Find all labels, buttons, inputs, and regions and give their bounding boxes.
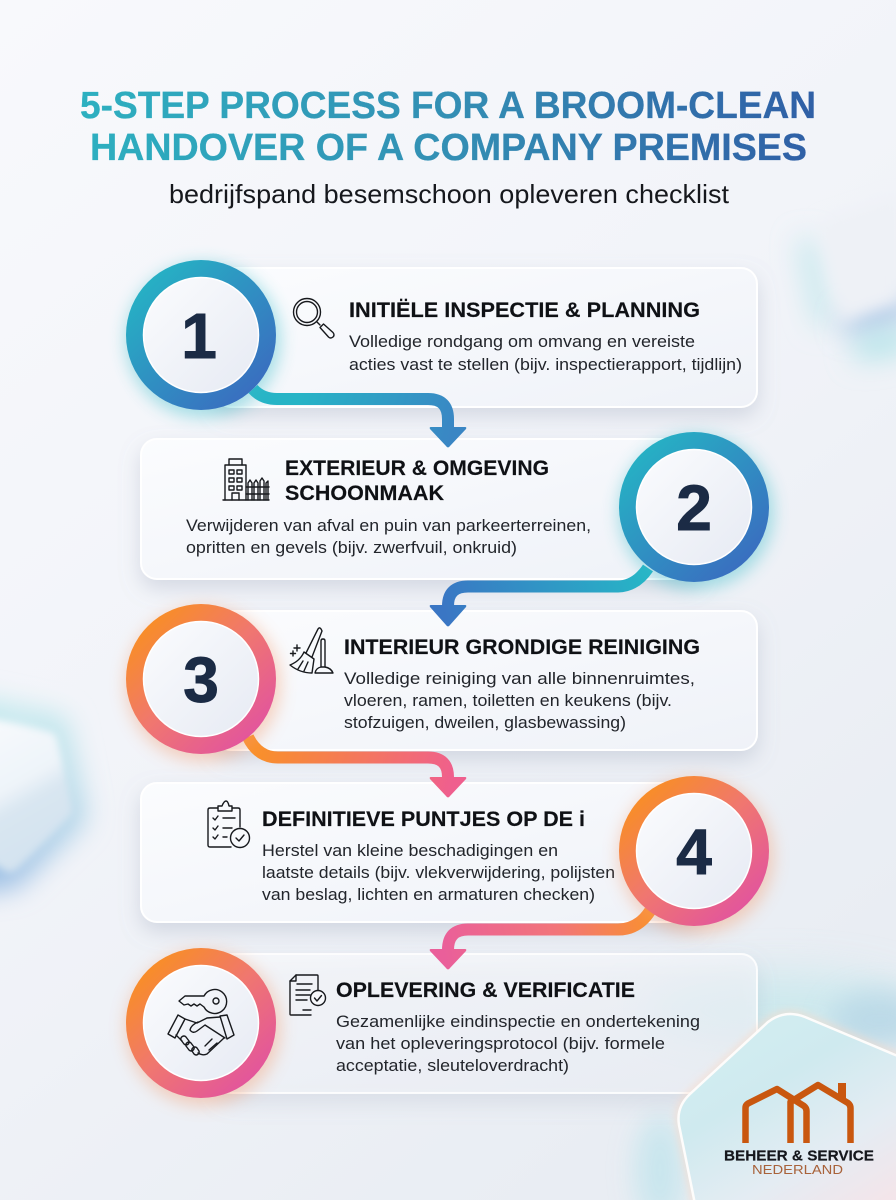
- arrow: step 4 to 5: [430, 911, 650, 970]
- text: step 2 description: [186, 516, 591, 557]
- logo: Beheer & Service Nederland: [724, 1083, 874, 1177]
- logo name: BEHEER & SERVICE: [724, 1148, 874, 1164]
- text: step 4 description: laatste details (bijv. vlekverwijdering, polijsten: [262, 863, 615, 882]
- panel: step 2 card: [141, 439, 701, 579]
- icon: checklist clipboard: [208, 801, 250, 848]
- heading: step 3: INTERIEUR GRONDIGE REINIGING: [344, 636, 700, 659]
- logo subline: NEDERLAND: [752, 1162, 843, 1177]
- icon: signed document: [290, 975, 326, 1015]
- text: step 4 description: Herstel van kleine beschadigingen en: [262, 841, 558, 860]
- text: step 5 description: Gezamenlijke eindinspectie en ondertekening: [336, 1012, 700, 1031]
- step 2 number circle: [618, 432, 774, 590]
- panel: step 5 card: [215, 954, 757, 1093]
- step 3 number circle: 3: [183, 644, 219, 716]
- icon: key: [179, 989, 227, 1014]
- icon: handshake: [168, 1015, 234, 1055]
- logo badge background: [678, 1014, 896, 1200]
- text: step 5 description: van het opleveringsprotocol (bijv. formele: [336, 1034, 665, 1053]
- panel: step 4 card: [141, 783, 701, 922]
- step 4 number circle: 4: [676, 816, 712, 888]
- text: step 1 description: [349, 332, 742, 374]
- step 2 number circle: 2: [676, 472, 712, 544]
- text: step 3 description: vloeren, ramen, toiletten en keukens (bijv.: [344, 691, 672, 710]
- title: 5-STEP PROCESS FOR A BROOM-CLEAN: [80, 85, 816, 127]
- subtitle: bedrijfspand besemschoon opleveren checklist: [169, 179, 730, 209]
- icon: twin house roofline: [746, 1083, 850, 1143]
- heading: step 2: EXTERIEUR & OMGEVING: [285, 457, 549, 480]
- step 5 handshake circle: [125, 948, 281, 1106]
- title: [80, 85, 816, 169]
- step 1 number circle: 1: [181, 300, 217, 372]
- heading: step 4: DEFINITIEVE PUNTJES OP DE i: [262, 808, 585, 831]
- icon: building and fence: [223, 459, 269, 500]
- step 4 number circle: [618, 776, 774, 934]
- step 3 number circle: [125, 604, 281, 762]
- arrow: step 3 to 4: [248, 737, 466, 798]
- text: step 5 description: acceptatie, sleuteloverdracht): [336, 1056, 569, 1075]
- icon: magnifying glass: [294, 298, 334, 338]
- heading: step 2: [285, 457, 549, 505]
- text: step 2 description: Verwijderen van afval en puin van parkeerterreinen,: [186, 516, 591, 535]
- text: step 5 description: [336, 1012, 700, 1075]
- text: step 3 description: [344, 669, 695, 732]
- arrow: step 1 to 2: [253, 389, 466, 448]
- text: step 1 description: acties vast te stellen (bijv. inspectierapport, tijdlijn): [349, 355, 742, 374]
- heading: step 5: OPLEVERING & VERIFICATIE: [336, 979, 635, 1002]
- panel: step 1 card: [215, 268, 757, 407]
- icon: broom and plunger: [290, 628, 333, 673]
- step 1 number circle: [125, 260, 281, 418]
- heading: step 1: INITIËLE INSPECTIE & PLANNING: [349, 299, 700, 322]
- text: step 3 description: Volledige reiniging van alle binnenruimtes,: [344, 669, 695, 688]
- arrow: step 2 to 3: [430, 568, 648, 626]
- text: step 2 description: opritten en gevels (bijv. zwerfvuil, onkruid): [186, 538, 517, 557]
- text: step 4 description: van beslag, lichten en armaturen checken): [262, 885, 595, 904]
- text: step 4 description: [262, 841, 615, 904]
- text: step 3 description: stofzuigen, dweilen, glasbewassing): [344, 713, 626, 732]
- title: HANDOVER OF A COMPANY PREMISES: [90, 127, 807, 169]
- text: step 1 description: Volledige rondgang om omvang en vereiste: [349, 332, 695, 351]
- panel: step 3 card: [215, 611, 757, 750]
- heading: step 2: SCHOONMAAK: [285, 482, 444, 505]
